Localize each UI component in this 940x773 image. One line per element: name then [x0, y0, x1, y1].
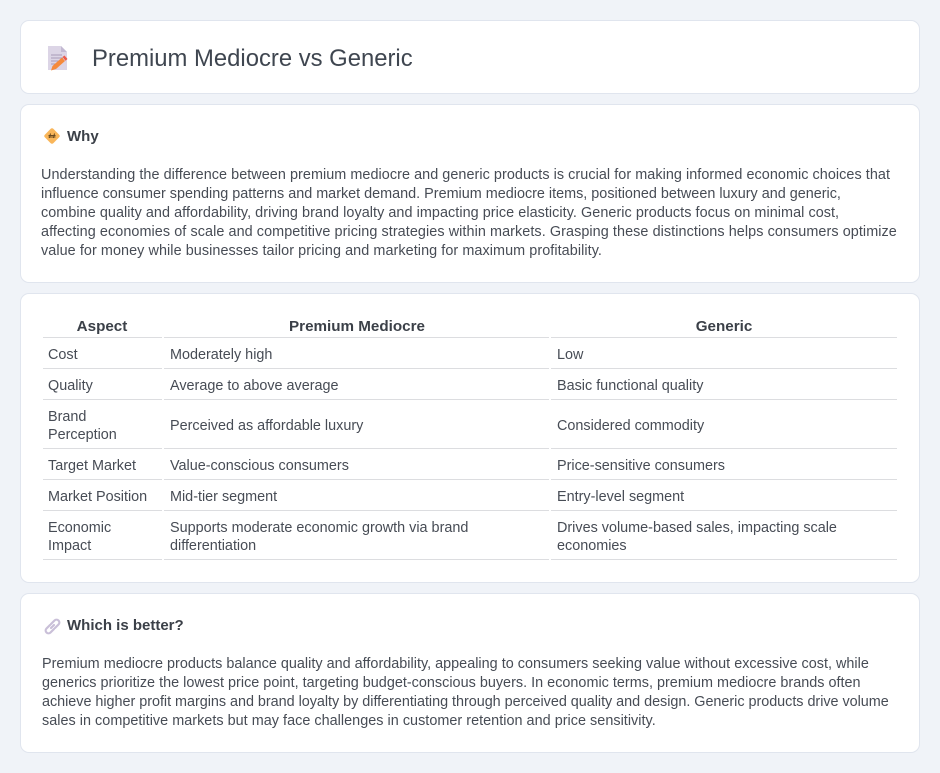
- icon: document with pencil: [48, 46, 68, 70]
- table header: Aspect: [77, 318, 127, 335]
- table row: target market: Target Market: [48, 458, 136, 474]
- table row: brand perception: [43, 409, 897, 449]
- panel: which is better: [20, 593, 920, 753]
- icon: chain link: [44, 618, 60, 634]
- table row: economic impact: Economic: [48, 520, 111, 536]
- text block: why paragraph: affecting economies of scale and competitive pricing strategies within markets. Grasping these distinctions helps consumers optimize: [41, 224, 897, 240]
- table row: economic impact: Drives volume-based sales, impacting scale: [557, 520, 837, 536]
- table row: cost: Low: [557, 347, 583, 363]
- text block: why paragraph: Understanding the difference between premium mediocre and generic products is crucial for making informed economic choices that: [41, 167, 890, 183]
- text block: why paragraph: [41, 167, 897, 259]
- table row: cost: Moderately high: [170, 347, 272, 363]
- table row: target market: Price-sensitive consumers: [557, 458, 725, 474]
- table row: market position: Entry-level segment: [557, 489, 684, 505]
- table row: quality: Quality: [48, 378, 93, 394]
- table row: market position: [43, 489, 897, 511]
- panel: title: [20, 20, 920, 94]
- table row: brand perception: Considered commodity: [557, 418, 704, 434]
- table row: economic impact: Impact: [48, 538, 91, 554]
- table row: brand perception: Brand: [48, 409, 86, 425]
- table row: economic impact: [43, 520, 897, 560]
- text block: why paragraph: value for money while businesses tailor pricing and marketing for maximum profitability.: [41, 243, 602, 259]
- text block: why paragraph: combine quality and affordability, driving brand loyalty and impacting price elasticity. Generic products focus on minimal cost,: [41, 205, 839, 221]
- table row: quality: Basic functional quality: [557, 378, 703, 394]
- heading: why: Why: [67, 128, 99, 145]
- text block: which is better paragraph: generics prioritize the lowest price point, targeting budget-conscious buyers. In economic terms, premium mediocre brands often: [42, 675, 861, 691]
- heading: which is better: Which is better?: [67, 617, 184, 634]
- table row: market position: Mid-tier segment: [170, 489, 277, 505]
- table row: quality: Average to above average: [170, 378, 339, 394]
- heading: page title: Premium Mediocre vs Generic: [92, 45, 413, 72]
- table row: brand perception: Perceived as affordable luxury: [170, 418, 363, 434]
- table row: cost: Cost: [48, 347, 78, 363]
- table row: quality: [43, 378, 897, 400]
- table row: brand perception: Perception: [48, 427, 117, 443]
- table header: [43, 318, 897, 338]
- table row: economic impact: economies: [557, 538, 627, 554]
- table header: Premium Mediocre: [289, 318, 425, 335]
- panel: comparison table: [20, 293, 920, 583]
- table row: target market: Value-conscious consumers: [170, 458, 349, 474]
- text block: which is better paragraph: [42, 656, 889, 729]
- table row: economic impact: differentiation: [170, 538, 256, 554]
- panel: why: [20, 104, 920, 283]
- text block: why paragraph: influence consumer spending patterns and market demand. Premium mediocre items, positioned between luxury and generic,: [41, 186, 841, 202]
- text block: which is better paragraph: Premium mediocre products balance quality and affordability, appealing to consumers seeking value without excessive cost, while: [42, 656, 869, 672]
- text block: which is better paragraph: achieve higher profit margins and brand loyalty by differentiating through perceived quality and design. Generic products drive volume: [42, 694, 889, 710]
- table row: target market: [43, 458, 897, 480]
- text block: which is better paragraph: sales in competitive markets but may face challenges in customer retention and price sensitivity.: [42, 713, 656, 729]
- table row: cost: [43, 347, 897, 369]
- table row: economic impact: Supports moderate economic growth via brand: [170, 520, 468, 536]
- icon: warning diamond: [44, 128, 60, 144]
- table row: market position: Market Position: [48, 489, 147, 505]
- table header: Generic: [696, 318, 752, 335]
